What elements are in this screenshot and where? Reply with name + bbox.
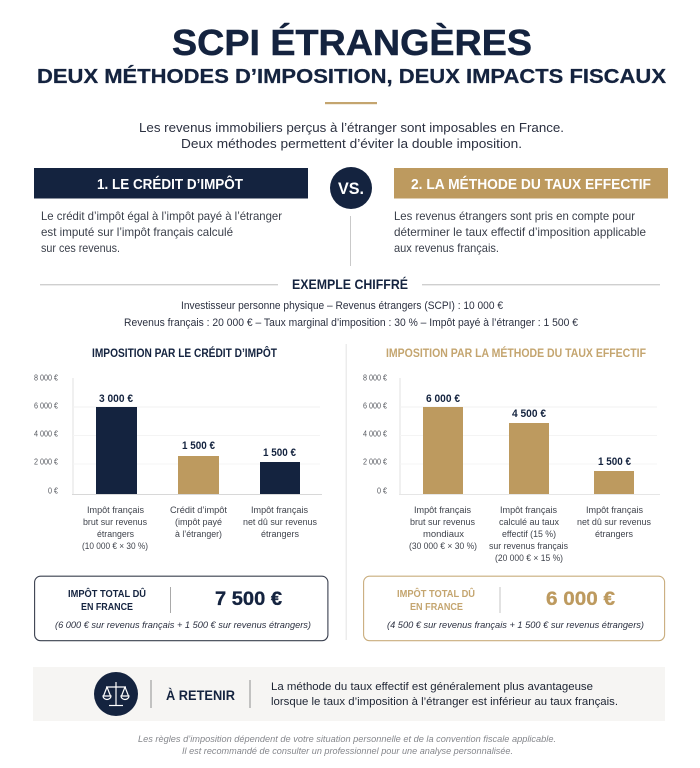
text: takeaway message xyxy=(271,681,618,708)
callout: total tax, effective rate method: (4 500 € sur revenus français + 1 500 € sur revenus étrangers) xyxy=(387,620,644,631)
text: method 2 description: aux revenus français. xyxy=(394,241,499,255)
bar: net French tax xyxy=(243,447,317,539)
panel: method 2 header: 2. LA MÉTHODE DU TAUX EFFECTIF xyxy=(411,176,651,193)
bar: gross tax on worldwide income: mondiaux xyxy=(423,529,465,539)
bar: tax at effective rate: Impôt français xyxy=(500,505,557,515)
axis and grid: 4 000 € xyxy=(363,430,387,438)
text: method 1 description: sur ces revenus. xyxy=(41,241,120,255)
bar: gross French tax xyxy=(82,393,148,551)
bar: gross French tax: (10 000 € × 30 %) xyxy=(82,541,148,551)
bar: gross French tax: brut sur revenus xyxy=(83,517,147,527)
axis and grid: 8 000 € xyxy=(34,374,58,382)
text: example assumptions: Revenus français : 20 000 € – Taux marginal d’imposition : 30 % – Impôt payé à l’étranger : 1 500 € xyxy=(124,317,578,329)
bar: net French tax: net dû sur revenus xyxy=(577,517,651,527)
footer disclaimer: Il est recommandé de consulter un professionnel pour une analyse personnalisée. xyxy=(182,746,513,756)
title: SCPI ÉTRANGÈRES xyxy=(172,22,532,63)
heading: worked example: EXEMPLE CHIFFRÉ xyxy=(292,276,408,292)
axis and grid: 6 000 € xyxy=(34,402,58,410)
callout: total tax, credit method: IMPÔT TOTAL DÛ xyxy=(68,587,146,600)
text: takeaway message: lorsque le taux d’imposition à l’étranger est inférieur au taux français. xyxy=(271,696,618,708)
bar: gross tax on worldwide income: brut sur revenus xyxy=(410,517,475,527)
text: example assumptions xyxy=(124,300,578,329)
panel: tax credit chart xyxy=(34,347,322,551)
panel: key takeaway xyxy=(33,667,665,721)
callout: total tax, credit method: EN FRANCE xyxy=(81,602,133,613)
bar: tax credit: Crédit d’impôt xyxy=(170,505,228,515)
introduction text: Deux méthodes permettent d’éviter la double imposition. xyxy=(181,136,522,151)
bar: tax credit: 1 500 € xyxy=(182,440,215,452)
callout: total tax, credit method xyxy=(35,576,328,641)
introduction text xyxy=(139,120,564,151)
bar: net French tax: 1 500 € xyxy=(598,456,631,468)
panel: method 1 header: 1. LE CRÉDIT D’IMPÔT xyxy=(97,175,243,193)
bar: gross tax on worldwide income: 6 000 € xyxy=(426,393,460,405)
bar: gross tax on worldwide income: Impôt français xyxy=(414,505,471,515)
axis and grid: 8 000 € xyxy=(363,374,387,382)
bar: tax at effective rate: (20 000 € × 15 %) xyxy=(495,553,563,563)
bar: tax credit: (impôt payé xyxy=(175,517,222,527)
bar: net French tax: Impôt français xyxy=(586,505,643,515)
text: method 1 description: est imputé sur l’impôt français calculé xyxy=(41,225,233,239)
callout: total tax, effective rate method xyxy=(364,576,665,641)
bar: tax credit: à l’étranger) xyxy=(175,529,222,539)
text: method 1 description xyxy=(41,209,282,255)
icon: VS badge xyxy=(330,167,372,209)
bar: gross tax on worldwide income xyxy=(409,393,477,551)
bar: net French tax: 1 500 € xyxy=(263,447,296,459)
text: example assumptions: Investisseur personne physique – Revenus étrangers (SCPI) : 10 000 € xyxy=(181,300,503,312)
panel: method 1 header xyxy=(34,168,308,198)
text: method 2 description xyxy=(394,209,646,255)
bar: tax at effective rate xyxy=(489,408,568,563)
text: method 2 description: déterminer le taux effectif d’imposition applicable xyxy=(394,225,646,239)
bar: tax at effective rate: 4 500 € xyxy=(512,408,546,420)
bar: gross tax on worldwide income: (30 000 € × 30 %) xyxy=(409,541,477,551)
footer disclaimer: Les règles d’imposition dépendent de votre situation personnelle et de la convention fiscale applicable. xyxy=(138,734,556,744)
axis and grid: 0 € xyxy=(377,486,387,496)
callout: total tax, effective rate method: IMPÔT TOTAL DÛ xyxy=(397,587,475,600)
bar: net French tax: étrangers xyxy=(261,529,299,539)
axis and grid: 2 000 € xyxy=(363,458,387,466)
bar: net French tax: net dû sur revenus xyxy=(243,517,317,527)
callout: total tax, effective rate method: 6 000 € xyxy=(546,589,615,610)
axis and grid xyxy=(34,374,322,496)
bar: net French tax: étrangers xyxy=(595,529,633,539)
heading: key takeaway: À RETENIR xyxy=(166,688,235,703)
bar: net French tax xyxy=(577,456,651,539)
introduction text: Les revenus immobiliers perçus à l’étranger sont imposables en France. xyxy=(139,120,564,135)
bar: gross French tax: étrangers xyxy=(97,529,134,539)
text: method 2 description: Les revenus étrangers sont pris en compte pour xyxy=(394,209,635,223)
chart heading: IMPOSITION PAR LE CRÉDIT D’IMPÔT xyxy=(92,347,277,360)
chart heading: IMPOSITION PAR LA MÉTHODE DU TAUX EFFECTIF xyxy=(386,347,646,360)
text: method 1 description: Le crédit d’impôt égal à l’impôt payé à l’étranger xyxy=(41,209,282,223)
panel: method 2 header xyxy=(394,168,668,198)
bar: tax at effective rate: calculé au taux xyxy=(499,517,559,527)
axis and grid: 4 000 € xyxy=(34,430,58,438)
icon: scales of justice xyxy=(94,672,138,716)
subtitle: DEUX MÉTHODES D’IMPOSITION, DEUX IMPACTS FISCAUX xyxy=(37,65,667,88)
axis and grid xyxy=(363,374,660,496)
panel: effective rate chart xyxy=(363,347,660,563)
icon: VS badge: VS. xyxy=(338,179,364,198)
callout: total tax, credit method: 7 500 € xyxy=(215,589,282,610)
bar: tax at effective rate: effectif (15 %) xyxy=(502,529,556,539)
bar: gross French tax: Impôt français xyxy=(87,505,144,515)
axis and grid: 0 € xyxy=(48,486,58,496)
footer disclaimer xyxy=(138,734,556,756)
bar: tax credit xyxy=(170,440,228,539)
bar: gross French tax: 3 000 € xyxy=(99,393,133,405)
bar: tax at effective rate: sur revenus français xyxy=(489,541,568,551)
text: takeaway message: La méthode du taux effectif est généralement plus avantageuse xyxy=(271,681,593,693)
axis and grid: 6 000 € xyxy=(363,402,387,410)
callout: total tax, credit method: (6 000 € sur revenus français + 1 500 € sur revenus étrangers) xyxy=(55,620,311,631)
bar: net French tax: Impôt français xyxy=(251,505,308,515)
axis and grid: 2 000 € xyxy=(34,458,58,466)
callout: total tax, effective rate method: EN FRANCE xyxy=(410,602,463,613)
